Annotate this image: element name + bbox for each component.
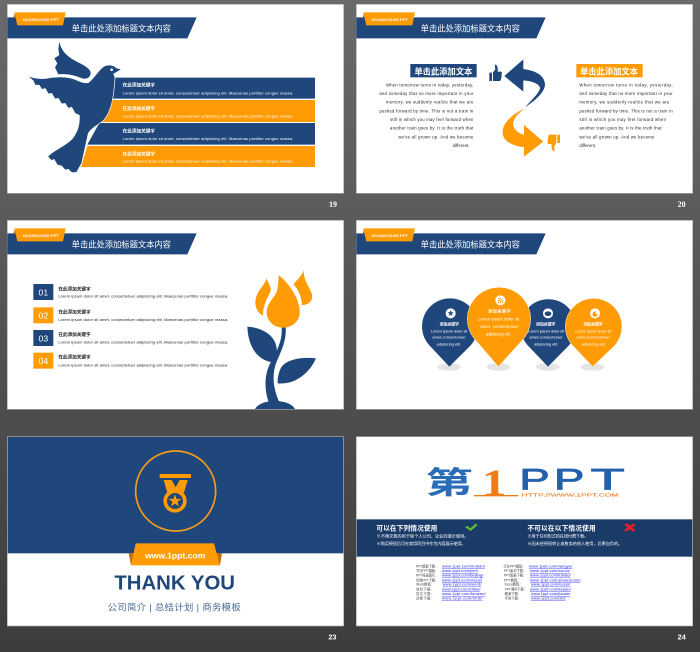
pin 4: amet,consectetuer xyxy=(577,336,611,340)
usage band: ※用于任何形式的在线付费下载。 xyxy=(527,532,588,538)
link list right: www.1ppt.com/tubiao/ xyxy=(530,573,572,578)
usage band: 不可以在以下情况使用 xyxy=(527,524,596,533)
pin 1: adipiscing elit. xyxy=(437,342,461,346)
right paragraph: still in which you may feel forward when xyxy=(579,117,667,122)
numbered list: 03 xyxy=(39,333,48,343)
arrow: orange xyxy=(503,108,543,157)
text bars: 在此添加关键字 xyxy=(123,150,155,157)
usage band: ※因未经授权转让或售卖给他人使用，后果自负的。 xyxy=(527,540,622,546)
header banner: HUANGUANG PPT xyxy=(23,17,60,22)
left paragraph: different. xyxy=(453,143,469,148)
pin 3: adipiscing elit. xyxy=(534,342,558,346)
text bars: Lorem ipsum dolor sit amet, consectetuer adipiscing elit. Maecenas porttitor congue massa. xyxy=(123,159,293,164)
link list right: www.1ppt.com/hangye/ xyxy=(529,563,573,568)
link list right: PPT教程： xyxy=(504,577,521,582)
link list right: PPT图表下载： xyxy=(504,573,526,578)
link list left: Word教程： xyxy=(416,582,434,587)
panel: slide 21 flower xyxy=(7,220,344,409)
right paragraph: pushed forward by time. This is not a train in xyxy=(579,108,673,113)
left paragraph: we've all grown up. And we become xyxy=(398,134,474,139)
pin 4: adipiscing elit. xyxy=(581,342,606,346)
link list right: 教案下载： xyxy=(505,591,521,596)
pin 1 xyxy=(422,298,478,367)
icon: check mark xyxy=(465,524,478,531)
left heading xyxy=(410,64,477,77)
left paragraph: pushed forward by time. This is not a train in xyxy=(379,108,474,113)
blue header block xyxy=(8,437,343,553)
link list left: www.1ppt.com/jieri/ xyxy=(442,568,479,573)
pin 3: amet,consectetuer xyxy=(529,336,563,340)
pin 4 xyxy=(565,298,622,367)
panel: slide 19 bird xyxy=(7,4,344,209)
logo xyxy=(425,461,625,504)
usage band: ※不限次数的用于除个人公司、企业的演示使用。 xyxy=(377,532,468,538)
header banner: 单击此处添加标题文本内容 xyxy=(421,239,520,249)
panel: slide 22 pins xyxy=(356,220,693,409)
usage band xyxy=(357,519,692,557)
link list left: www.1ppt.com/beijing/ xyxy=(442,573,484,578)
page number: 22 xyxy=(678,345,686,354)
left paragraph: memory, we suddenly realize that we are xyxy=(386,100,474,105)
arrow: navy xyxy=(504,59,545,107)
link list right: www.1ppt.com/kejian/ xyxy=(530,586,572,591)
link list right: PPT素材下载： xyxy=(504,568,526,573)
icon: thumbs down xyxy=(547,135,560,151)
icon: flower xyxy=(247,270,316,409)
numbered list: Lorem ipsum dolor sit amet, consectetuer adipiscing elit. Maecenas porttitor congue massa. xyxy=(58,294,228,299)
right paragraph: When tomorrow turns in today, yesterday, xyxy=(579,82,673,87)
pin shadows xyxy=(437,363,604,371)
text bars: Lorem ipsum dolor sit amet, consectetuer adipiscing elit. Maecenas porttitor congue massa. xyxy=(123,90,293,95)
pin 2: amet, consectetuer xyxy=(480,324,519,329)
left paragraph: still in which you may feel forward when xyxy=(390,117,474,122)
text bars: 在此添加关键字 xyxy=(123,105,155,112)
usage band: ※购买授权后可在商用项目中作为内容展示使用。 xyxy=(377,540,466,546)
icon: cross mark xyxy=(624,523,636,532)
link list right: www.1ppt.com/sucai/ xyxy=(530,568,571,573)
text bars xyxy=(81,78,315,167)
numbered list: Lorem ipsum dolor sit amet, consectetuer adipiscing elit. Maecenas porttitor congue massa. xyxy=(58,317,228,322)
numbered list: 01 xyxy=(39,287,48,297)
pin 2: 添加关键字 xyxy=(488,308,511,314)
numbered list: Lorem ipsum dolor sit amet, consectetuer adipiscing elit. Maecenas porttitor congue massa. xyxy=(58,362,228,367)
pin 2 xyxy=(467,287,531,367)
link list right: Excel教程： xyxy=(505,582,523,587)
numbered list xyxy=(33,284,228,369)
page number: 21 xyxy=(328,345,336,354)
link list left: www.1ppt.com/ziliao/ xyxy=(442,586,481,591)
link list right xyxy=(503,563,582,600)
page number: 24 xyxy=(678,633,687,642)
header banner: 单击此处添加标题文本内容 xyxy=(72,239,171,249)
header banner xyxy=(356,228,546,254)
header banner xyxy=(7,228,197,254)
link list right: 字体下载： xyxy=(505,595,521,600)
link list right: 行业PPT模板： xyxy=(503,563,526,568)
right paragraph: we've all grown up. And we become xyxy=(579,134,655,139)
link list left: www.1ppt.com/word/ xyxy=(443,582,482,587)
link list right: www.1ppt.com/ziti/ xyxy=(531,595,567,600)
text bars: Lorem ipsum dolor sit amet, consectetuer adipiscing elit. Maecenas porttitor congue massa. xyxy=(123,136,293,141)
right paragraph: and someday that no more important in your xyxy=(579,91,673,96)
ribbon: www.1ppt.com xyxy=(144,551,206,561)
numbered list: 在此添加关键字 xyxy=(58,331,91,338)
right heading xyxy=(576,64,643,77)
page number: 19 xyxy=(329,200,337,209)
icon: thumbs up xyxy=(489,65,502,81)
right paragraph: memory, we suddenly realize that we are xyxy=(579,100,670,105)
link list right: www.1ppt.com/powerpoint/ xyxy=(530,577,582,582)
link list left: 资料下载： xyxy=(416,586,434,591)
panel: slide 24 logo and usage xyxy=(356,437,693,642)
numbered list: 04 xyxy=(39,356,48,366)
pin 1: Lorem ipsum dolor sit xyxy=(431,329,468,333)
pin 3: Lorem ipsum dolor sit xyxy=(528,329,565,333)
pin 1: amet,consectetuer xyxy=(432,336,466,340)
numbered list: 在此添加关键字 xyxy=(58,285,91,292)
link list left: www.1ppt.com/fanwen/ xyxy=(442,591,487,596)
link list left: www.1ppt.com/shiti/ xyxy=(442,595,484,600)
numbered list: 02 xyxy=(39,311,48,321)
link list right: www.1ppt.com/excel/ xyxy=(531,582,571,587)
pin 2: Lorem ipsum dolor sit xyxy=(478,316,520,321)
header banner: 单击此处添加标题文本内容 xyxy=(421,23,520,33)
ribbon xyxy=(129,543,222,565)
page number: 20 xyxy=(678,200,686,209)
link list left: 优秀PPT下载： xyxy=(416,577,438,582)
header banner: 单击此处添加标题文本内容 xyxy=(72,23,171,33)
logo: HTTP://WWW.1PPT.COM xyxy=(522,493,619,498)
link list left: PPT背景图片： xyxy=(416,573,438,578)
header banner: HUANGUANG PPT xyxy=(23,233,60,238)
header banner: HUANGUANG PPT xyxy=(372,17,409,22)
logo: 1 xyxy=(482,461,507,504)
left paragraph: When tomorrow turns in today, yesterday, xyxy=(386,82,473,87)
numbered list: Lorem ipsum dolor sit amet, consectetuer adipiscing elit. Maecenas porttitor congue massa. xyxy=(58,340,228,345)
text bars: 在此添加关键字 xyxy=(123,128,155,135)
link list left: 试卷下载： xyxy=(416,595,434,600)
link list right: www.1ppt.com/jiaoan/ xyxy=(531,591,571,596)
link list left: 节日PPT模板： xyxy=(416,568,438,573)
header banner: HUANGUANG PPT xyxy=(372,233,409,238)
icon: dove xyxy=(27,42,122,173)
text bars: 在此添加关键字 xyxy=(123,82,155,89)
pin 2: adipiscing elit. xyxy=(486,331,511,336)
pin 3 xyxy=(521,299,576,367)
pin 3: 添加关键字 xyxy=(536,321,555,327)
pin 4: Lorem ipsum dolor sit xyxy=(575,329,612,333)
numbered list: 在此添加关键字 xyxy=(58,309,91,316)
left paragraph: another train goes by. It is the truth that xyxy=(390,126,474,131)
pin 1: 添加关键字 xyxy=(440,321,459,327)
logo: P xyxy=(519,463,550,496)
right paragraph: different. xyxy=(579,143,596,148)
left paragraph: and someday that no more important in your xyxy=(379,91,474,96)
link list right: PPT课件下载： xyxy=(505,586,527,591)
page number: 23 xyxy=(328,633,336,642)
pin 4: 添加关键字 xyxy=(583,321,603,327)
right paragraph: another train goes by. It is the truth that xyxy=(579,126,663,131)
right paragraph xyxy=(579,82,673,148)
subtitle: 公司简介 | 总结计划 | 商务模板 xyxy=(108,601,241,612)
logo: P xyxy=(554,463,584,496)
logo: T xyxy=(591,464,625,496)
header banner xyxy=(7,12,197,38)
link list left: www.1ppt.com/moban/ xyxy=(442,563,486,568)
link list left xyxy=(416,563,487,600)
text bars: Lorem ipsum dolor sit amet, consectetuer adipiscing elit. Maecenas porttitor congue massa. xyxy=(123,113,293,118)
icon: medal xyxy=(136,451,216,531)
header banner xyxy=(356,12,546,38)
logo: 第 xyxy=(425,466,473,500)
left paragraph xyxy=(379,82,474,148)
link list left: PPT模板下载： xyxy=(416,563,438,568)
link list left: www.1ppt.com/xiazai/ xyxy=(442,577,483,582)
left heading: 单击此添加文本 xyxy=(414,66,473,76)
panel: slide 23 thank you xyxy=(7,437,344,642)
link list left: 范文下载： xyxy=(416,591,434,596)
numbered list: 在此添加关键字 xyxy=(58,354,91,361)
usage band: 可以在下列情况使用 xyxy=(376,523,437,532)
panel: slide 20 arrows xyxy=(356,4,693,209)
title: THANK YOU xyxy=(114,571,235,594)
right heading: 单击此添加文本 xyxy=(580,66,639,76)
